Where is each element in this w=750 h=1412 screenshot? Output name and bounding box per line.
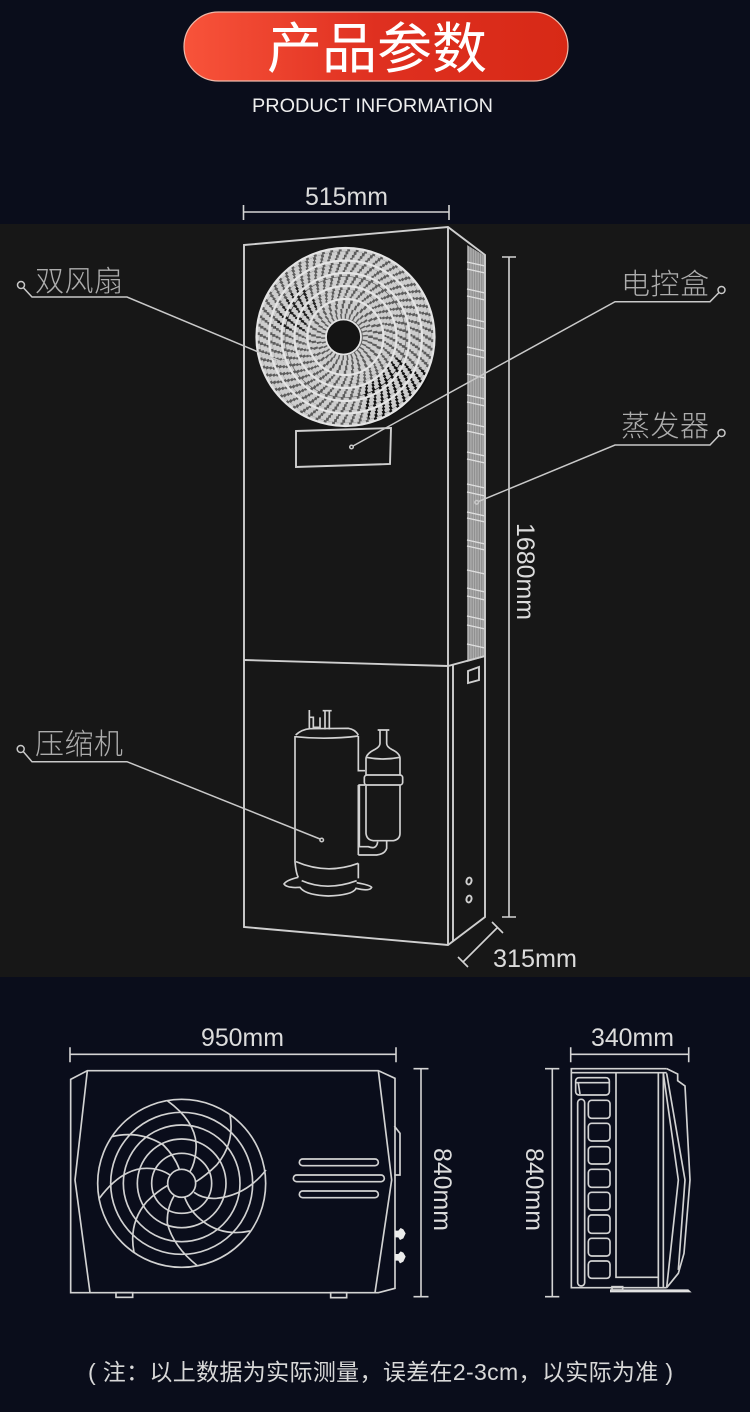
evaporator fin strip [467, 245, 485, 662]
outdoor unit vent slots [293, 1159, 384, 1198]
callout: double fan [18, 265, 285, 364]
subtitle: PRODUCT INFORMATION [252, 95, 493, 117]
dimension: indoor unit depth 315mm [458, 922, 577, 973]
callout: compressor: 压缩机 [35, 728, 123, 761]
dimension: indoor unit height 1680mm: 1680mm [511, 523, 539, 620]
dark drawing panel background [0, 224, 750, 977]
icon: indoor double fan [256, 248, 434, 426]
dimension: indoor unit width 515mm [243, 183, 449, 220]
dimension: indoor unit height 1680mm [502, 257, 539, 917]
dimension: outdoor unit height 840mm side [520, 1069, 559, 1297]
dimension: indoor unit width 515mm: 515mm [305, 183, 388, 211]
dimension: indoor unit depth 315mm: 315mm [493, 945, 577, 973]
dimension: outdoor unit height 840mm side: 840mm [520, 1148, 548, 1231]
callout: electric control box [350, 268, 725, 449]
side handle tray and slots [576, 1078, 610, 1286]
callout: evaporator [475, 410, 725, 504]
outdoor unit front view [71, 1071, 406, 1298]
dimension: outdoor unit depth 340mm: 340mm [591, 1024, 674, 1052]
dimension: outdoor unit width 950mm [70, 1024, 396, 1062]
dimension: outdoor unit depth 340mm [571, 1024, 689, 1062]
callout: evaporator: 蒸发器 [621, 410, 709, 443]
callout: double fan: 双风扇 [35, 265, 123, 298]
footnote: ( 注：以上数据为实际测量，误差在2-3cm，以实际为准 ) [88, 1359, 673, 1385]
outdoor fan guard [98, 1099, 266, 1267]
side base [610, 1287, 692, 1292]
indoor unit side vent window and holes [466, 667, 479, 903]
callout: electric control box: 电控盒 [621, 268, 709, 301]
dimension: outdoor unit height 840mm front [414, 1069, 456, 1297]
side casing [571, 1069, 690, 1288]
outdoor unit casing [71, 1071, 400, 1298]
dimension: outdoor unit width 950mm: 950mm [201, 1024, 284, 1052]
dimension: outdoor unit height 840mm front: 840mm [428, 1148, 456, 1231]
outdoor unit side view [571, 1069, 692, 1292]
pipe connectors [395, 1228, 406, 1263]
icon: compressor [284, 710, 403, 896]
title pill [184, 12, 568, 81]
callout: compressor [17, 728, 324, 842]
title pill: 产品参数 [267, 18, 487, 80]
electric control box [296, 428, 391, 467]
indoor unit cabinet outline [244, 227, 485, 945]
